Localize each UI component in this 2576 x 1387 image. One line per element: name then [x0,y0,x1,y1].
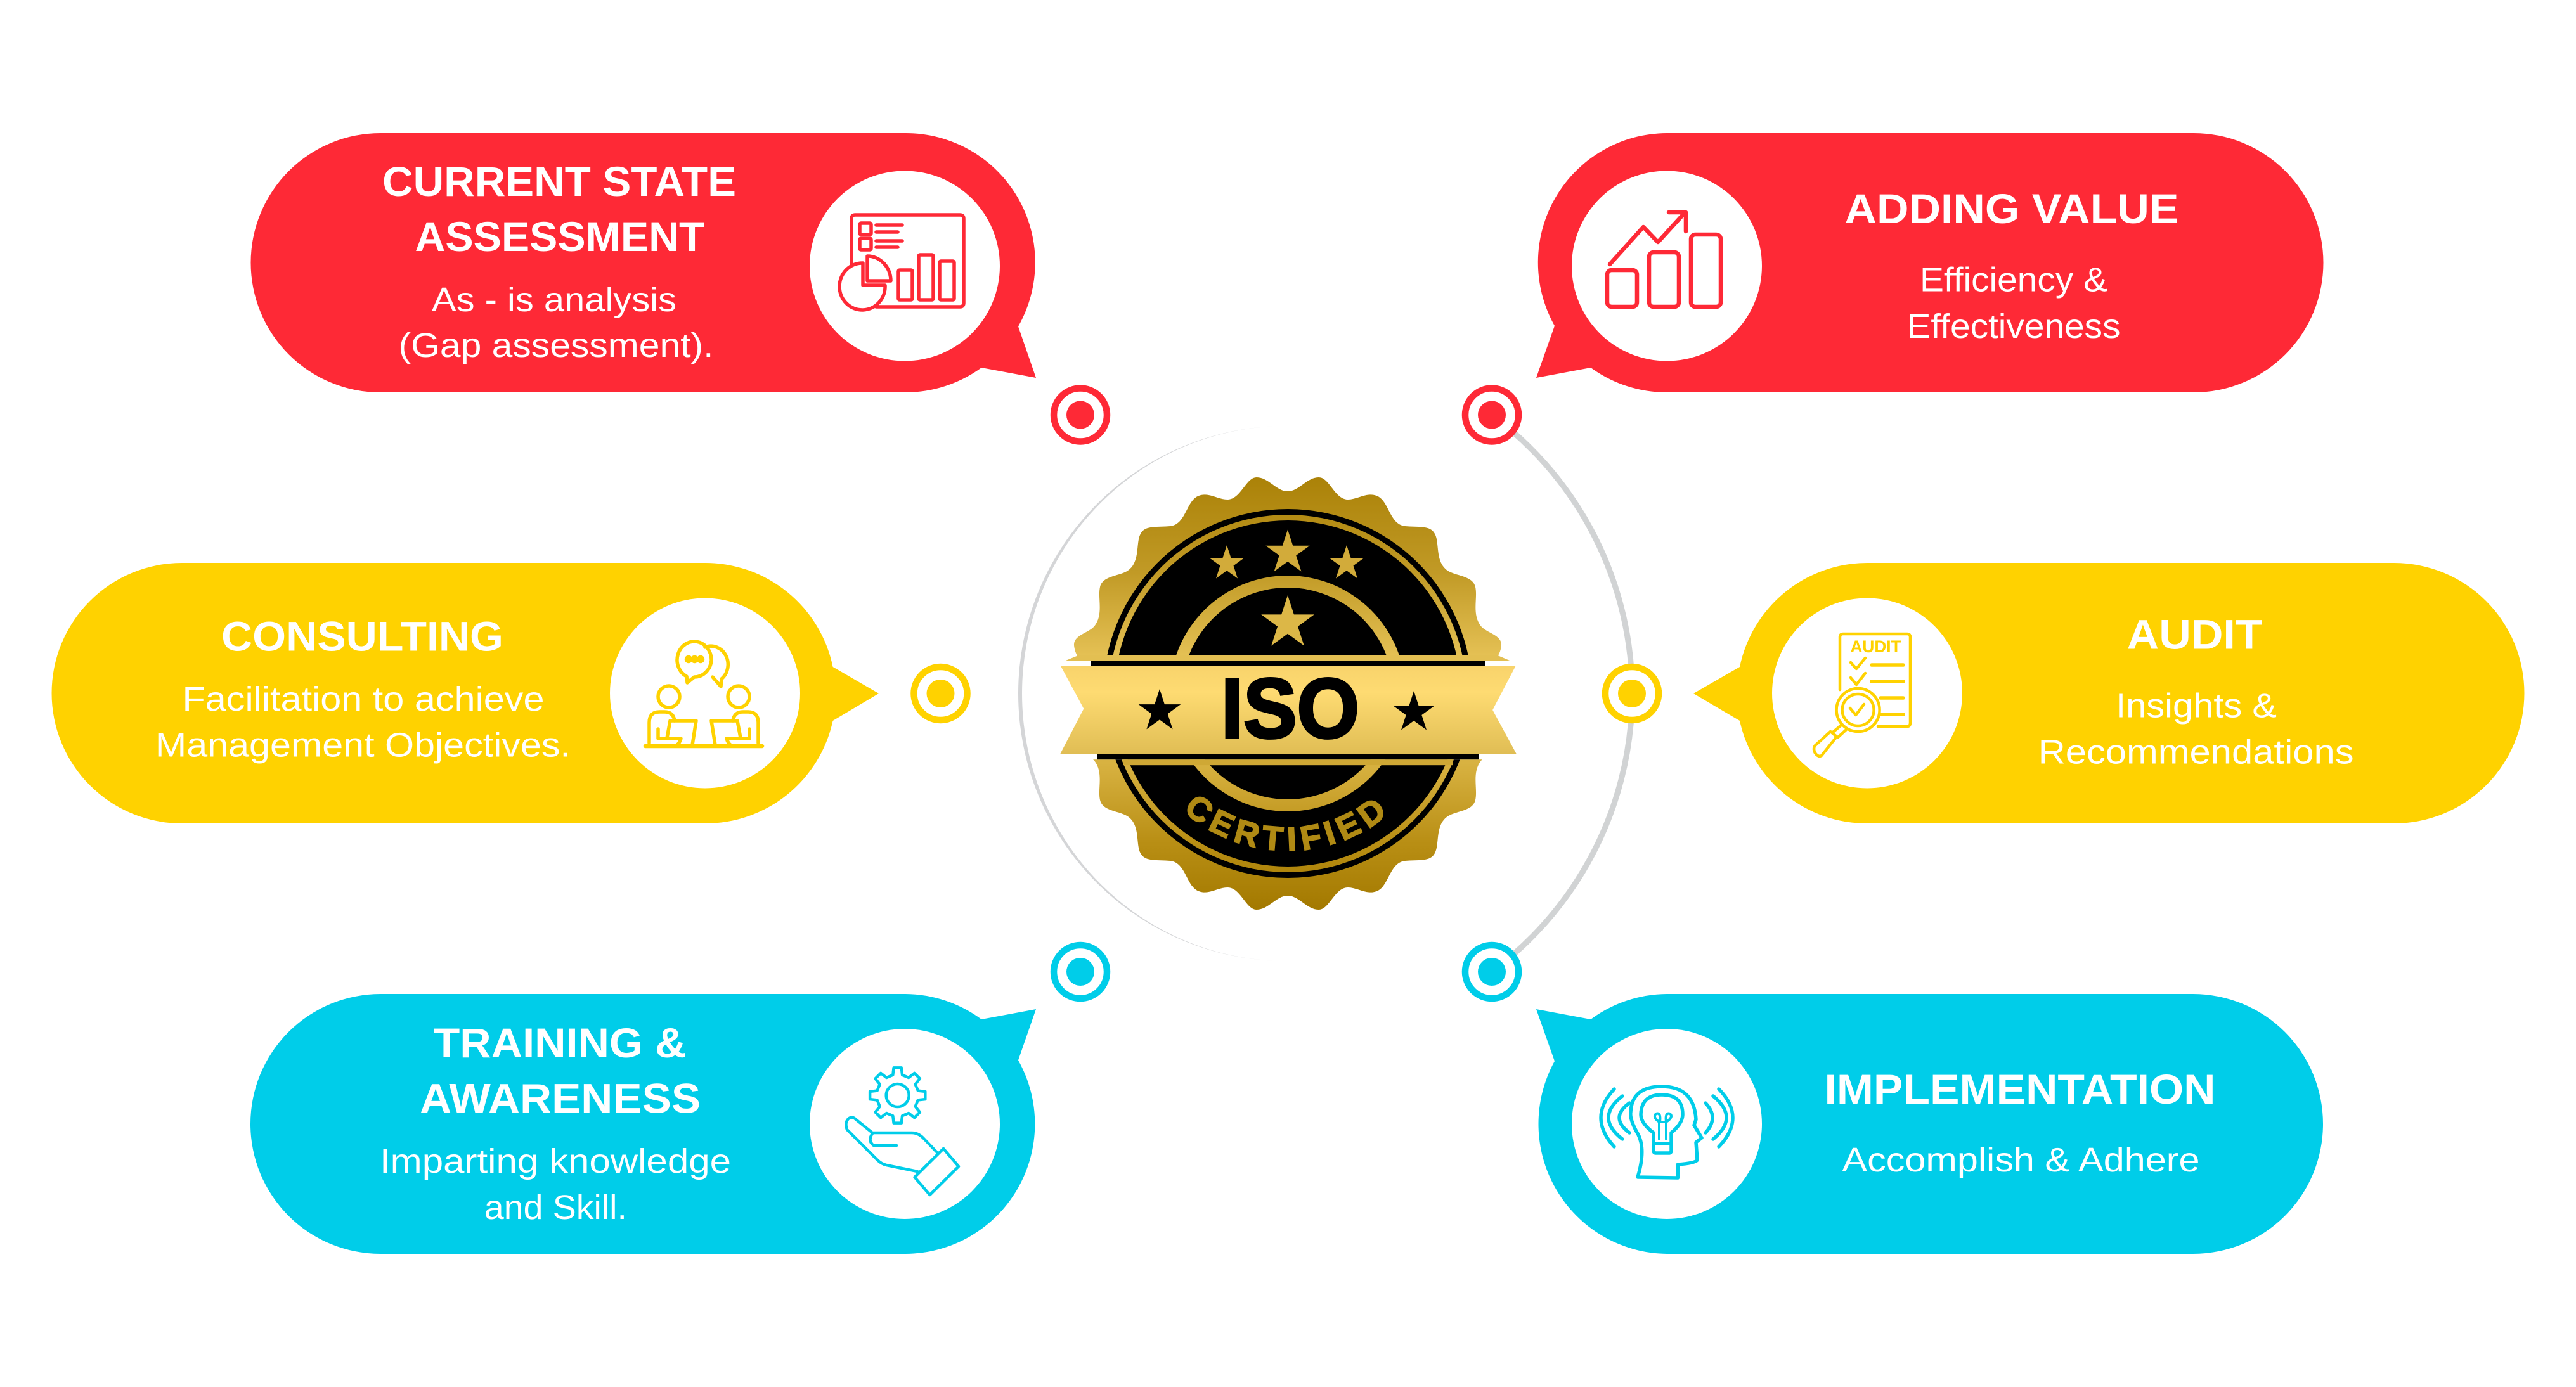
marker dot red right [1465,388,1518,441]
right thick arc [1492,415,1632,972]
icon: audit checklist with magnifier: AUDIT [1850,637,1901,656]
description [380,1142,731,1227]
pill body cyan [1536,994,2323,1254]
pill body yellow [1693,563,2524,823]
icon: audit checklist with magnifier [1814,634,1910,756]
ribbon upper black band [1091,661,1485,666]
description: As - is analysis [432,281,676,319]
heading: AUDIT [2127,611,2263,658]
description: and Skill. [484,1189,627,1227]
certified curved text: CERTIFIED [1187,796,1383,851]
heading: CONSULTING [221,613,503,660]
ribbon [1060,666,1517,754]
icon: growth bars [1607,212,1721,307]
heading: ADDING VALUE [1845,185,2178,232]
icon: two people talking [645,642,762,746]
description: Efficiency & [1920,261,2107,299]
heading: IMPLEMENTATION [1825,1066,2215,1113]
heading: CURRENT STATE [382,158,736,205]
icon: dashboard charts [839,215,964,310]
icon circle [1572,1029,1762,1219]
description: Management Objectives. [155,726,571,764]
scalloped gold seal [1074,477,1501,910]
icon: head with light bulb [1601,1087,1733,1178]
description: Imparting knowledge [380,1142,731,1180]
marker dot yellow left [914,667,968,720]
description: Accomplish & Adhere [1842,1141,2200,1179]
panel: training and awareness [250,994,1036,1254]
white cut behind ribbon [1052,661,1522,759]
pill body cyan [250,994,1036,1254]
description: (Gap assessment). [398,326,714,364]
heading: TRAINING & [434,1019,686,1066]
pill body yellow [52,563,879,823]
description: Recommendations [2038,733,2354,771]
ribbon upper gold stripe [1065,655,1510,661]
ribbon stars [1139,689,1434,730]
description [2038,687,2354,771]
left thin arc [1018,426,1286,961]
pill body red [1536,133,2323,392]
ribbon lower gold stripe [1123,759,1453,765]
panel: current state assessment [251,133,1036,392]
description [1907,261,2120,345]
icon circle [810,171,1000,361]
marker dot cyan left [1054,945,1107,998]
heading: AWARENESS [420,1075,701,1122]
marker dot red left [1054,388,1107,441]
icon circle [1772,598,1962,789]
description: Insights & [2116,687,2277,725]
marker dot yellow right [1605,667,1659,720]
panel: consulting [52,563,879,823]
stars top row [1209,530,1364,646]
icon circle [1572,171,1762,361]
icon circle [810,1029,1000,1219]
marker dot cyan right [1465,945,1518,998]
ISO certified badge [1060,477,1517,910]
description [398,281,714,364]
ribbon lower black band [1097,754,1479,759]
panel: adding value [1536,133,2323,392]
icon: hand with gear [846,1068,959,1195]
icon circle [610,598,800,789]
description: Facilitation to achieve [183,680,545,718]
black and gold rings [1103,509,1472,878]
description: Effectiveness [1907,307,2120,345]
heading [382,158,736,260]
panel: implementation [1536,994,2323,1254]
description [155,680,571,764]
pill body red [251,133,1036,392]
heading [420,1019,701,1122]
panel: audit [1693,563,2524,823]
heading: ASSESSMENT [415,213,705,260]
ISO text: ISO [1221,662,1359,756]
